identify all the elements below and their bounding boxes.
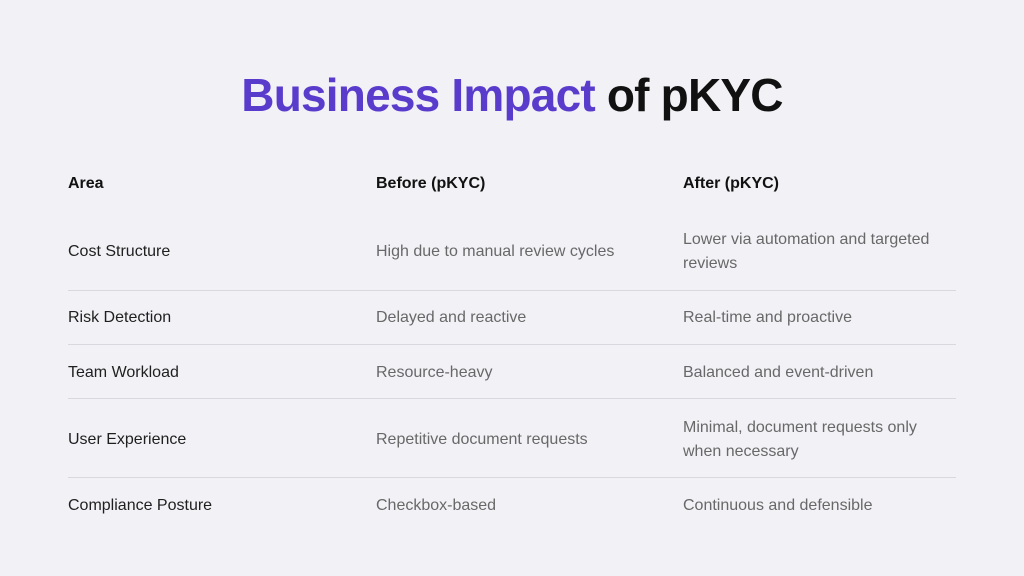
row: cost structure: Cost Structure bbox=[68, 243, 170, 260]
row: risk detection: Risk Detection bbox=[68, 309, 171, 326]
row: compliance posture bbox=[68, 497, 872, 514]
row: user experience: when necessary bbox=[683, 443, 799, 460]
header row: After (pKYC) bbox=[683, 175, 779, 192]
row: team workload: Team Workload bbox=[68, 364, 179, 381]
row: cost structure bbox=[68, 231, 929, 272]
row: user experience: Repetitive document requests bbox=[376, 431, 588, 448]
title: Business Impact of pKYC bbox=[241, 69, 783, 121]
row: cost structure: Lower via automation and targeted bbox=[683, 231, 929, 248]
row: user experience: User Experience bbox=[68, 431, 186, 448]
row: team workload: Resource-heavy bbox=[376, 364, 492, 381]
row: compliance posture: Compliance Posture bbox=[68, 497, 212, 514]
row: compliance posture: Checkbox-based bbox=[376, 497, 496, 514]
row: compliance posture: Continuous and defensible bbox=[683, 497, 872, 514]
row: cost structure: reviews bbox=[683, 255, 737, 272]
row: team workload: Balanced and event-driven bbox=[683, 364, 873, 381]
row: cost structure: High due to manual review cycles bbox=[376, 243, 614, 260]
row: risk detection: Real-time and proactive bbox=[683, 309, 852, 326]
row: user experience: Minimal, document requests only bbox=[683, 419, 917, 436]
row: team workload bbox=[68, 364, 873, 381]
row: user experience bbox=[68, 419, 917, 460]
row: risk detection bbox=[68, 309, 852, 326]
row: risk detection: Delayed and reactive bbox=[376, 309, 526, 326]
header row bbox=[68, 175, 779, 192]
header row: Before (pKYC) bbox=[376, 175, 485, 192]
header row: Area bbox=[68, 175, 104, 192]
